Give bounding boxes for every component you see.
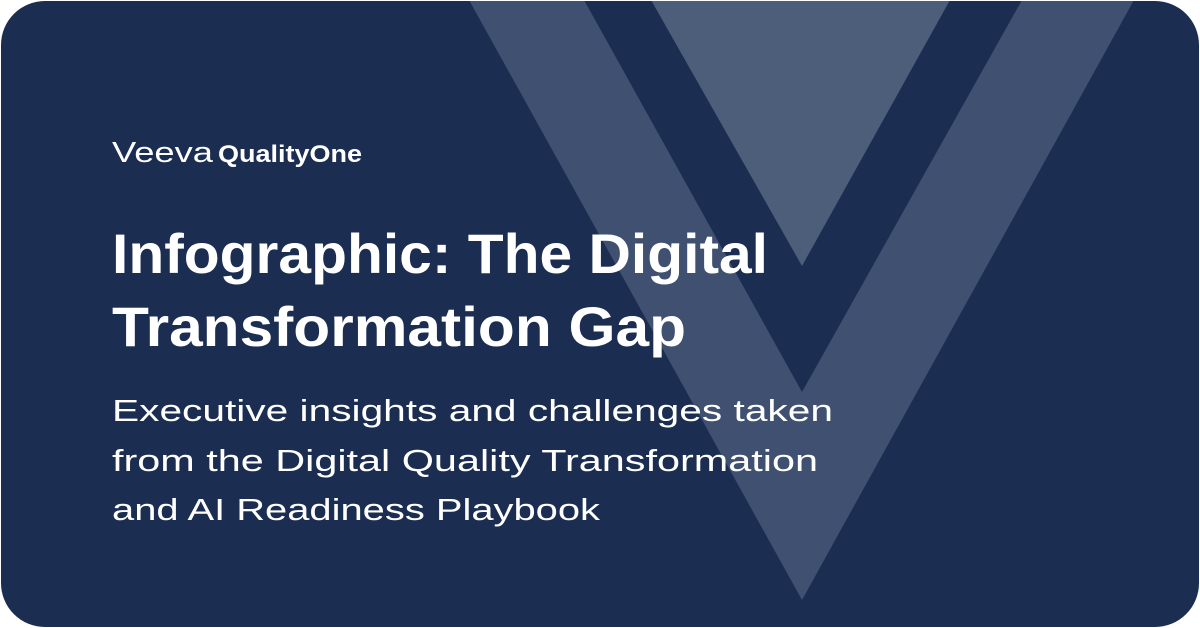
logo: QualityOne [218,141,362,168]
logo [112,137,362,169]
subtitle: Executive insights and challenges taken [112,393,833,428]
subtitle [112,393,833,527]
subtitle: and AI Readiness Playbook [112,492,601,527]
decorative V mark [469,0,1134,600]
title [112,222,768,358]
logo: Veeva [112,137,214,169]
subtitle: from the Digital Quality Transformation [112,443,818,478]
title: Transformation Gap [112,295,686,358]
title: Infographic: The Digital [112,222,768,285]
